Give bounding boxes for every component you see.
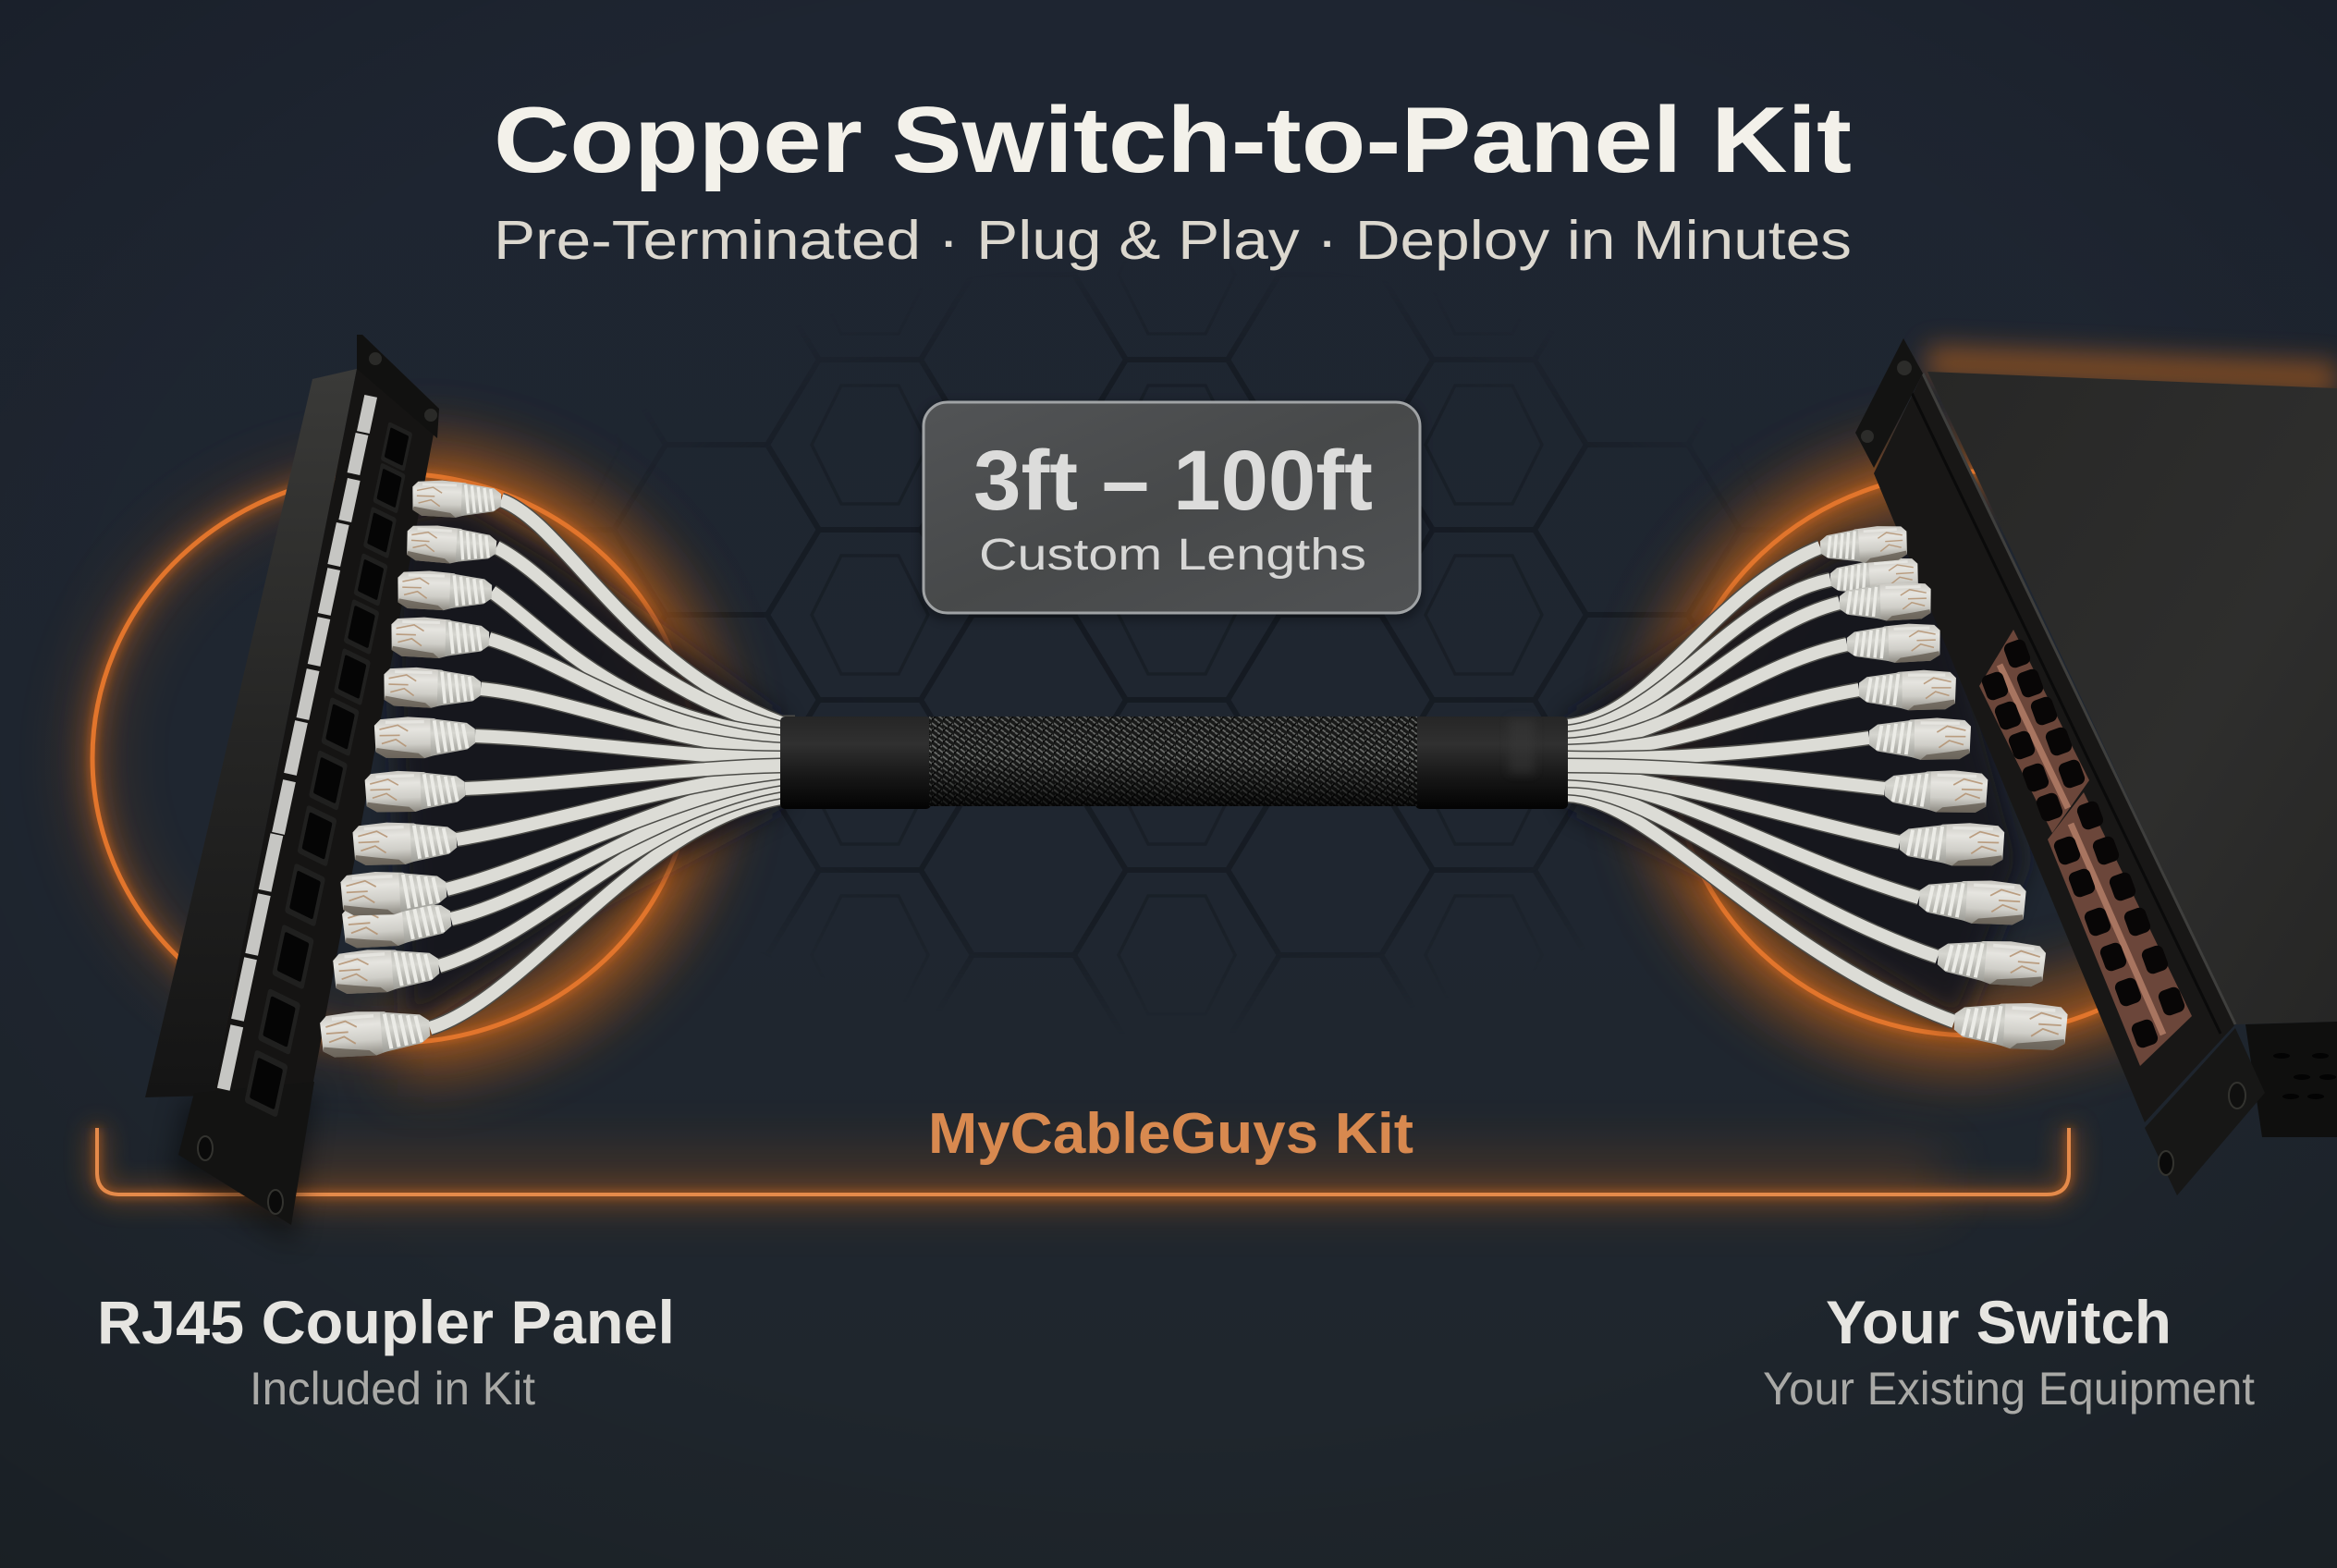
right device label: Your Switch [1826, 1288, 2172, 1356]
badge caption: Custom Lengths [979, 531, 1366, 580]
panel ports [244, 422, 412, 1118]
hexagon background pattern [686, 330, 1668, 958]
right orange glowing ring [1673, 472, 2274, 1035]
right RJ45 plugs [1819, 524, 2068, 1052]
left heat shrink [780, 717, 931, 809]
top mounting ear [1855, 338, 1923, 468]
right device sublabel: Your Existing Equipment [1763, 1363, 2255, 1415]
left RJ45 plugs [319, 480, 502, 1060]
right heat shrink [1415, 717, 1568, 809]
right device: your switch [1855, 338, 2337, 1195]
title: Copper Switch-to-Panel Kit [494, 89, 1852, 192]
left fan of white cables [430, 500, 795, 1028]
right fan of white cables [1553, 547, 1954, 1022]
left device sublabel: Included in Kit [250, 1363, 535, 1415]
copper port block 1 [1979, 630, 2089, 833]
switch top surface [1927, 372, 2337, 1024]
braided sleeve [929, 717, 1417, 806]
kit bracket line [97, 1128, 2069, 1194]
orange glow above switch [1927, 362, 2337, 379]
kit label: MyCableGuys Kit [928, 1102, 1413, 1166]
panel side slab [145, 369, 357, 1097]
dark backing behind cable fans [388, 499, 2025, 1026]
left orange glowing ring [92, 473, 693, 1043]
switch front face [1874, 374, 2235, 1122]
cable sleeve: heat-shrink and braid [780, 717, 1568, 809]
left device label: RJ45 Coupler Panel [97, 1288, 675, 1356]
switch side with vents [2245, 1022, 2337, 1137]
subtitle: Pre-Terminated · Plug & Play · Deploy in Minutes [494, 210, 1852, 271]
badge shadow [920, 402, 1424, 620]
top mounting ear [357, 335, 439, 438]
white label strips [217, 395, 377, 1091]
panel front face [213, 369, 437, 1096]
copper port block 2 [2048, 792, 2192, 1066]
left device: RJ45 coupler panel [145, 335, 439, 1243]
badge value: 3ft – 100ft [973, 434, 1373, 528]
bottom mounting ear [2145, 1028, 2265, 1195]
bottom mounting ear [178, 1082, 314, 1225]
length badge [920, 402, 1424, 620]
panel drop shadow [171, 1091, 314, 1243]
badge glass plate [924, 402, 1420, 613]
